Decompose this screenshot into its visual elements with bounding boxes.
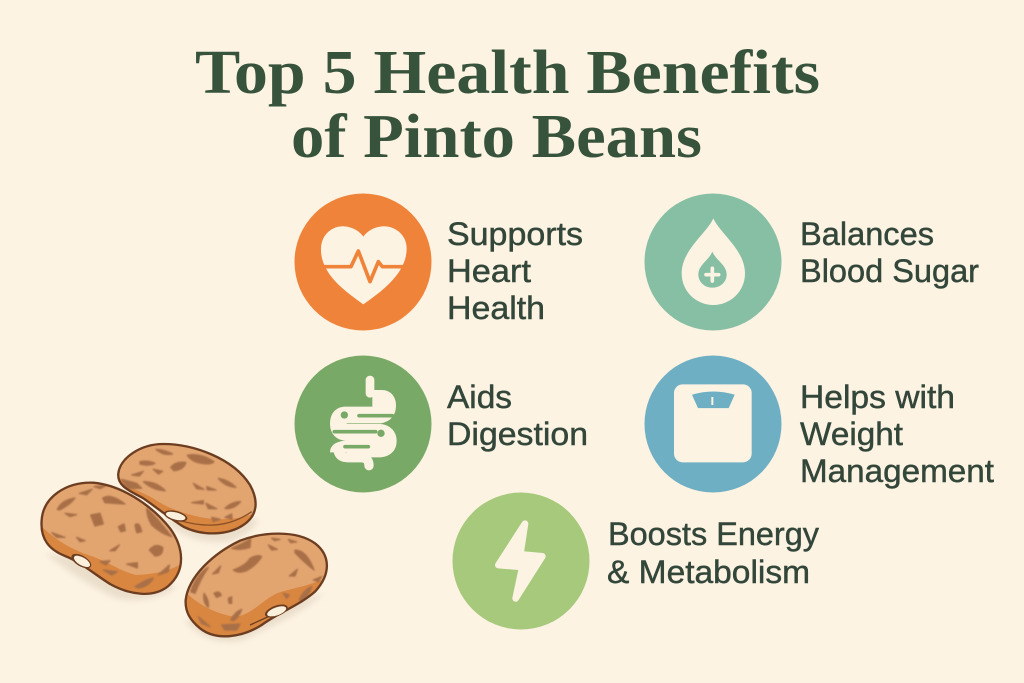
title: Top 5 Health Benefits — [195, 39, 820, 107]
label: Digestion — [447, 416, 588, 452]
illustration: pinto beans — [38, 440, 333, 642]
label: Supports — [447, 216, 583, 252]
label: & Metabolism — [607, 554, 810, 590]
label — [800, 216, 979, 289]
label — [800, 379, 994, 489]
icon: blood drop with plus — [644, 194, 782, 330]
benefit: aids digestion — [294, 356, 588, 492]
benefit: balances blood sugar — [644, 194, 979, 330]
label — [447, 216, 583, 326]
icon: heart with pulse — [294, 194, 432, 330]
label: Boosts Energy — [608, 516, 819, 552]
icon: weighing scale — [644, 356, 782, 492]
bean: left — [38, 480, 187, 600]
benefit: boosts energy and metabolism — [452, 492, 819, 630]
label: Health — [447, 290, 545, 326]
bean: right — [183, 530, 333, 642]
icon: intestines — [294, 356, 432, 492]
title — [195, 39, 820, 171]
bean: top — [115, 440, 260, 542]
label: Heart — [447, 253, 531, 289]
label — [447, 379, 588, 452]
title: of Pinto Beans — [291, 103, 702, 171]
benefit: supports heart health — [294, 194, 583, 330]
label: Management — [800, 453, 994, 489]
label: Balances — [800, 216, 934, 252]
label: Helps with — [800, 379, 955, 415]
benefit: helps with weight management — [644, 356, 994, 492]
label: Blood Sugar — [800, 253, 979, 289]
label — [607, 516, 819, 590]
label: Weight — [800, 416, 903, 452]
label: Aids — [447, 379, 512, 415]
icon: lightning bolt — [452, 492, 590, 630]
